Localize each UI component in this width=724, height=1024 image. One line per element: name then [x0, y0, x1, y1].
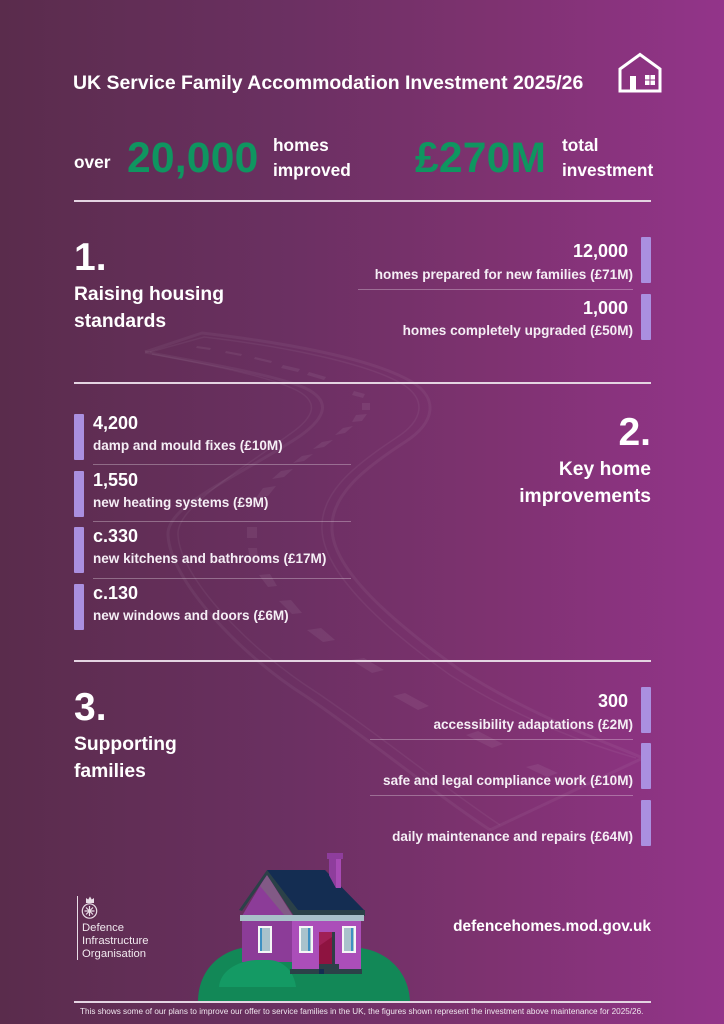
panel: section 1 raising housing standards: [74, 236, 651, 340]
icon: crest: [82, 896, 98, 919]
stat: over 20,000 homes improved: [74, 134, 351, 182]
item: 300 accessibility: accessibility adaptations (£2M): [433, 717, 633, 732]
stat: £270M total investment: [415, 134, 654, 182]
section 1 heading: standards: [74, 311, 166, 332]
bush: [219, 960, 296, 987]
section 2 heading: [519, 411, 651, 507]
item: 300 accessibility: 300: [598, 691, 628, 711]
section 2 heading: 2.: [618, 411, 651, 454]
item: maintenance: [392, 800, 651, 846]
section 3 heading: families: [74, 761, 146, 782]
icon: house outline: [618, 52, 662, 92]
item: 1,000 homes upgraded: 1,000: [583, 298, 628, 318]
footnote: This shows some of our plans to improve our offer to service families in the UK, the figures shown represent the investment above maintenance for 2025/26.: [80, 1007, 643, 1016]
item: 1,000 homes upgraded: homes completely upgraded (£50M): [403, 323, 633, 338]
eaves: [240, 915, 364, 921]
item: c.330 kitchens: new kitchens and bathrooms (£17M): [93, 551, 326, 566]
stat: £270M total investment: £270M: [415, 134, 546, 182]
item: 4,200 damp and mould: [74, 413, 283, 460]
stat: over 20,000 homes improved: 20,000: [127, 134, 258, 182]
item: 1,550 heating: [74, 470, 268, 517]
logo: Defence Infrastructure Organisation: Infrastructure: [82, 935, 149, 947]
website link: defencehomes.mod.gov.uk: [453, 918, 651, 935]
stat: over 20,000 homes improved: homes: [273, 135, 329, 155]
hill: [198, 948, 410, 1002]
item: compliance: safe and legal compliance work (£10M): [383, 773, 633, 788]
item: 12,000 homes prepared: [375, 237, 651, 283]
item: c.330 kitchens: [74, 526, 326, 573]
logo: Defence Infrastructure Organisation: Defence: [82, 922, 124, 934]
logo: Defence Infrastructure Organisation: [77, 896, 149, 960]
section 1 heading: Raising housing: [74, 284, 224, 305]
item: 12,000 homes prepared: homes prepared for new families (£71M): [375, 267, 633, 282]
section 1 heading: 1.: [74, 236, 107, 279]
item: 1,550 heating: 1,550: [93, 470, 138, 490]
item: c.130 windows: c.130: [93, 583, 138, 603]
item: 4,200 damp and mould: damp and mould fixes (£10M): [93, 438, 283, 453]
stat: £270M total investment: investment: [562, 160, 653, 180]
panel: section 3 supporting families: [74, 686, 651, 846]
roof: [267, 870, 364, 910]
panel: section 2 key home improvements: [74, 411, 651, 630]
windows: [258, 926, 356, 953]
section 3 heading: 3.: [74, 686, 107, 729]
item: compliance: [383, 743, 651, 789]
section 1 heading: [74, 236, 224, 332]
logo: Defence Infrastructure Organisation: Organisation: [82, 948, 146, 960]
illustration: house on hill: [198, 853, 410, 1001]
door: [319, 932, 335, 964]
item: 300 accessibility: [433, 687, 651, 733]
stat: over 20,000 homes improved: improved: [273, 160, 351, 180]
step and base: [290, 969, 362, 974]
section 2 heading: Key home: [559, 459, 651, 480]
section 2 heading: improvements: [519, 486, 651, 507]
stat: £270M total investment: total: [562, 135, 598, 155]
item: c.130 windows: [74, 583, 289, 630]
section 3 heading: Supporting: [74, 734, 177, 755]
chimney: [329, 857, 341, 888]
item: c.330 kitchens: c.330: [93, 526, 138, 546]
title: UK Service Family Accommodation Investment 2025/26: [73, 72, 583, 94]
stat: over 20,000 homes improved: over: [74, 152, 111, 172]
item: c.130 windows: new windows and doors (£6M): [93, 608, 289, 623]
item: 1,550 heating: new heating systems (£9M): [93, 495, 268, 510]
item: 4,200 damp and mould: 4,200: [93, 413, 138, 433]
item: maintenance: daily maintenance and repairs (£64M): [392, 829, 633, 844]
house body: [242, 916, 292, 962]
item: 12,000 homes prepared: 12,000: [573, 241, 628, 261]
item: 1,000 homes upgraded: [403, 294, 651, 340]
section 3 heading: [74, 686, 177, 782]
